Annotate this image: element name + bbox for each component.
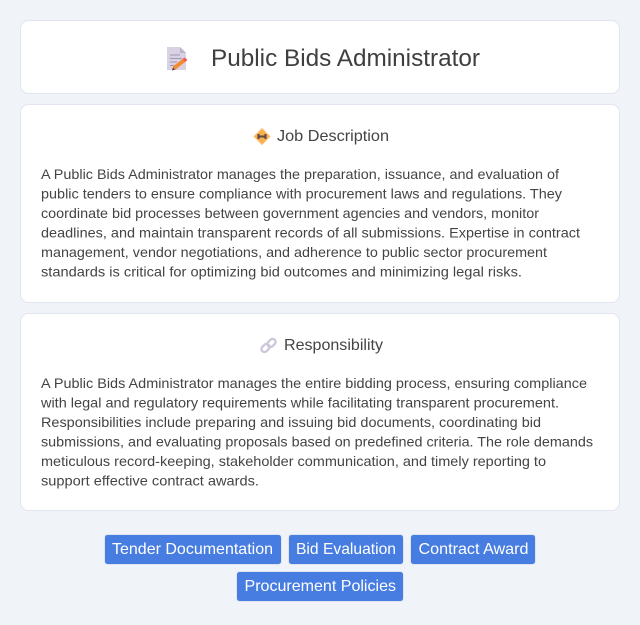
panel: header	[20, 20, 620, 94]
icon: diamond sign	[254, 128, 270, 144]
text block: responsibility: support effective contract awards.	[41, 472, 259, 488]
tag: procurement policies: Procurement Policies	[244, 578, 396, 595]
text block: job description: public tenders to ensure compliance with procurement laws and regulations. They	[41, 186, 562, 202]
text block: job description: standards is critical for optimizing bid outcomes and minimizing legal risks.	[41, 264, 522, 280]
panel: job description	[20, 104, 620, 302]
heading: responsibility: Responsibility	[284, 337, 383, 354]
tag: bid evaluation	[288, 534, 404, 564]
text block: responsibility: meticulous record-keeping, stakeholder communication, and timely reporting to	[41, 453, 546, 469]
text block: job description: deadlines, and maintain transparent records of all submissions. Expertise in contract	[41, 224, 580, 240]
text block: job description	[41, 166, 580, 280]
title: Public Bids Administrator	[211, 45, 480, 72]
tag: contract award: Contract Award	[418, 541, 528, 558]
icon: chain link	[260, 338, 277, 353]
text block: responsibility: submissions, and evaluating proposals based on predefined criteria. The role demands	[41, 434, 593, 450]
tag: contract award	[410, 534, 536, 564]
text block: responsibility: Responsibilities include preparing and issuing bid documents, coordinating bid	[41, 414, 541, 430]
tag: bid evaluation: Bid Evaluation	[296, 541, 396, 558]
icon: document with pencil	[167, 47, 188, 70]
text block: responsibility: with legal and regulatory requirements while facilitating transparent procurement.	[40, 394, 559, 410]
text block: job description: coordinate bid processes between government agencies and vendors, monitor	[41, 205, 539, 221]
tag: tender documentation: Tender Documentation	[112, 541, 273, 558]
heading: job description: Job Description	[277, 128, 389, 145]
text block: responsibility: A Public Bids Administrator manages the entire bidding process, ensuring compliance	[41, 375, 587, 391]
tag: procurement policies	[236, 572, 404, 602]
text block: job description: A Public Bids Administrator manages the preparation, issuance, and evaluation of	[41, 166, 559, 182]
panel: responsibility	[20, 314, 620, 510]
text block: responsibility	[40, 375, 593, 488]
tag: tender documentation	[104, 534, 282, 564]
text block: job description: management, vendor negotiations, and adherence to public sector procurement	[41, 244, 547, 260]
